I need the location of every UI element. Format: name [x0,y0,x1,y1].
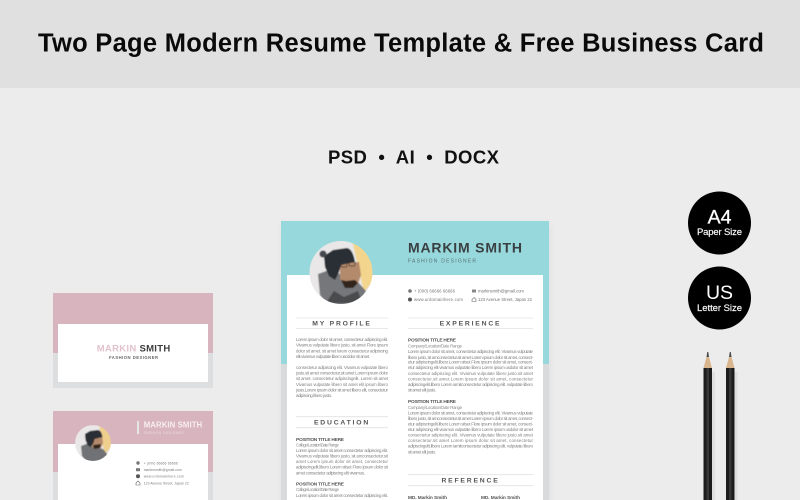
my profile section: sit amet. consectetur adipiscingelit. Lorem sit amet [296,376,389,381]
experience section: sit amet elit justo. [408,388,436,393]
education section: adipiscingelit.libero Lorem sitset Flore ipsum dolor sit [296,465,389,470]
experience section: consectetur.sit amet Lorem ipsum dolor sit amet, consectetur [408,376,534,382]
experience section: libero justo, sit amconsectetur.sit amet Lorem ipsum dolor sit amet, consect- [408,416,534,421]
my profile section: justo.Lorem ipsum dolor sit amet libero elit, consectetur [295,387,389,392]
experience section: adipiscingelit.libero Lorem iamitconsectetur adipiscing elit. vulputate libero [408,382,534,387]
experience section: consectetur adipiscing elit. Vivamus vulputate libero justo.sit amet [408,433,534,438]
card role: FASHION DESIGNER [109,355,158,360]
header band [0,0,800,88]
experience section: sit amet elit justo. [408,449,436,454]
my profile section: Lorem ipsum dolor sit amet, consectetur adipiscing elit. [296,337,388,342]
badge: US letter size [688,266,751,330]
experience section: consectetur.sit amet Lorem ipsum dolor sit amet, consectetur [408,438,534,443]
card contacts [136,461,189,485]
contact details: markinsmith@gmail.com [478,288,524,294]
experience section: etur adipiscingelit.libero Lorem sitset Flore ipsum dolor sit amet, consect- [408,421,534,426]
my profile section: Vivamus vulputate libero justo, sit amet Flore ipsum [296,343,388,348]
my profile section [295,318,389,398]
reference section: REFERENCE [441,478,500,484]
education section: EDUCATION [314,420,370,426]
experience section: Lorem ipsum dolor sit amet, consectetur adipiscing elit. Vivamus vulputate [408,349,534,354]
contact details: 123 Avenue Street, Japan 22 [478,297,533,302]
card contacts: www.urdomainhere.com [144,475,184,479]
badge: US letter size: US [706,282,733,304]
my profile section: Vivamus vulputate libero sit amet elit ipsum libero [296,382,389,387]
education section: College/Location/Date Range [296,487,340,492]
format list: PSD • AI • DOCX [328,146,500,168]
experience section: Lorem ipsum dolor sit amet, consectetur adipiscing elit. Vivamus vulputate [408,410,534,415]
card contacts: + (000) 66666 66666 [144,461,178,465]
education section [296,417,389,498]
title: Two Page Modern Resume Template & Free Business Card [38,30,764,58]
card photo [75,425,111,462]
contact details: + (000) 66666 66666 [414,288,456,294]
badge: A4 paper size: Paper Size [697,227,742,238]
card contacts: markinsmith@gmail.com [144,468,182,472]
my profile section: justo.sit amet consectetur.sit amet Lorem ipsum dolor [295,370,389,376]
badge: A4 paper size: A4 [708,206,732,228]
experience section: consectetur adipiscing elit. Vivamus vulputate libero justo.sit amet [408,371,534,376]
icon: left pencil [704,352,715,500]
icon: right pencil [726,352,738,500]
badge: US letter size: Letter Size [697,303,742,314]
experience section: etur adipiscing elit vivamus vulputate libero Lorem ipsum usdolor sit amet [408,427,534,432]
card name: MARKIN SMITH [97,344,170,354]
my profile section: adipiscing libero justo. [296,393,332,398]
contact details [408,288,533,302]
my profile section: MY PROFILE [312,321,372,328]
resume name: MARKIM SMITH [408,240,522,256]
card divider [137,421,139,434]
education section: Lorem ipsum dolor sit amet consectetur adipiscing elit. [296,448,388,453]
experience section [408,318,534,454]
reference section [408,475,533,500]
experience section: EXPERIENCE [440,321,501,328]
education section: amet consectetur adipiscing elit vivamus. [296,470,365,475]
my profile section: consectetur adipiscing elit. Vivamus vulputate libero [296,365,389,370]
education section: College/Location/Date Range [296,442,340,448]
business card back [53,411,213,500]
experience section: libero justo, sit amconsectetur.sit amet Lorem ipsum dolor sit amet, consect- [408,355,534,360]
education section: Vivamus vulputate libero justo, sit amconsectetur.sit [296,454,389,458]
experience section: POSITION TITLE HERE [408,338,457,344]
my profile section: elit vivamus vulputate libero uscdolor sit amet. [296,354,370,359]
education section: amet Lorem ipsum dolor sit amet, consectetur [296,459,389,464]
experience section: Company/Location/Date Range [408,405,463,410]
experience section: POSITION TITLE HERE [408,399,457,405]
education section: POSITION TITLE HERE [296,437,345,443]
contact details: www.urdomainhere.com [414,297,463,302]
experience section: Company/Location/Date Range [408,344,463,348]
education section: POSITION TITLE HERE [296,482,345,488]
education section: Lorem ipsum dolor sit amet consectetur adipiscing elit. [296,493,388,498]
resume photo [309,240,374,305]
resume role: FASHION DESIGNER [408,259,476,265]
my profile section: dolor sit amet. sit amet lorem consectetur adipiscing [296,348,389,353]
badge: A4 paper size [688,192,751,254]
resume mockup [281,221,549,500]
card back name: MARKIN SMITH [144,420,203,429]
card contacts: 123 Avenue Street, Japan 22 [144,481,189,485]
experience section: adipiscingelit.libero Lorem iamitconsectetur adipiscing elit. vulputate libero [408,444,534,449]
experience section: etur adipiscingelit.libero Lorem sitset Flore ipsum dolor sit amet, consect- [408,360,534,364]
card back role: FASHION DESIGNER [144,431,184,435]
experience section: etur adipiscing elit vivamus vulputate libero Lorem ipsum usdolor sit amet [408,365,534,370]
business card front [53,293,213,388]
